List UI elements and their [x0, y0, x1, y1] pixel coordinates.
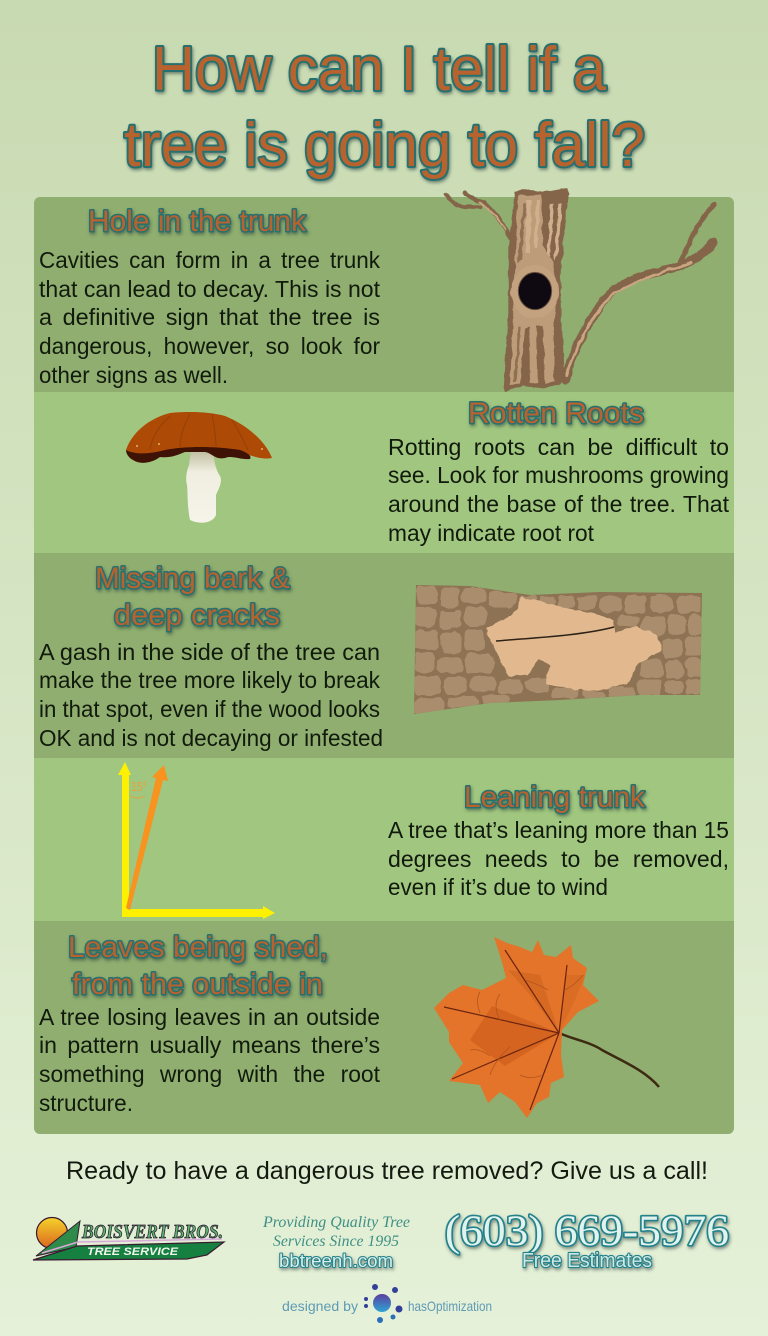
text: leaves description: A tree losing leaves in an outside [39, 1004, 380, 1030]
text: roots description: may indicate root rot [388, 520, 595, 546]
title: How can I tell if a [152, 35, 606, 104]
tagline [262, 1214, 410, 1250]
icon: mushroom [126, 412, 272, 523]
heading: rotten roots: Rotten Roots [468, 397, 644, 430]
text: roots description: see. Look for mushrooms growing [388, 462, 729, 488]
text: roots description [388, 434, 730, 546]
chart: 15 degree lean diagram [118, 762, 275, 919]
text: hole description: Cavities can form in a tree trunk [39, 247, 380, 273]
text: bark description [39, 639, 383, 751]
credit: designed by hasOptimization: hasOptimization [408, 1298, 492, 1314]
credit: designed by hasOptimization [282, 1284, 492, 1323]
panel: leaning trunk [34, 758, 734, 921]
text: leaves description: structure. [39, 1090, 133, 1116]
icon: maple leaf [434, 937, 659, 1118]
text: bark description: A gash in the side of the tree can [39, 639, 380, 665]
panel: hole in the trunk [34, 197, 734, 392]
heading: leaves being shed: from the outside in [72, 968, 323, 1001]
heading: leaning trunk: Leaning trunk [464, 781, 646, 814]
heading: leaves being shed [68, 931, 328, 1001]
heading: missing bark and deep cracks [95, 562, 290, 632]
title: tree is going to fall? [124, 111, 645, 180]
text: roots description: around the base of the tree. That [388, 491, 730, 517]
panel: rotten roots [34, 392, 734, 553]
call to action: Ready to have a dangerous tree removed? Give us a call! [66, 1157, 708, 1185]
text: leaning description: A tree that’s leaning more than 15 [388, 817, 729, 843]
heading: leaves being shed: Leaves being shed, [68, 931, 328, 964]
text: hole description: other signs as well. [39, 362, 228, 388]
credit: designed by hasOptimization: designed by [282, 1298, 358, 1314]
heading: hole in the trunk: Hole in the trunk [88, 205, 307, 238]
logo: Boisvert Bros. Tree Service [33, 1218, 224, 1260]
text: bark description: make the tree more likely to break [39, 667, 380, 693]
text: hole description [39, 247, 381, 388]
icon: damaged bark [414, 585, 702, 714]
text: hole description: that can lead to decay. This is not [39, 276, 381, 302]
free estimates: Free Estimates [522, 1250, 652, 1272]
text: leaves description: something wrong with the root [39, 1061, 381, 1087]
text: hole description: a definitive sign that the tree is [39, 304, 380, 330]
icon: tree trunk with hole [446, 188, 713, 392]
text: leaning description: degrees needs to be removed, [388, 846, 729, 872]
text: roots description: Rotting roots can be difficult to [388, 434, 729, 460]
phone number: (603) 669-5976 [445, 1208, 729, 1255]
panel: leaves being shed [34, 921, 734, 1134]
text: leaning description [388, 817, 729, 900]
tagline: Services Since 1995 [273, 1233, 399, 1250]
text: leaves description [39, 1004, 381, 1116]
chart: 15 degree lean diagram: 15° [131, 779, 147, 794]
text: bark description: OK and is not decaying or infested [39, 725, 383, 751]
text: leaves description: in pattern usually means there’s [39, 1032, 380, 1058]
tagline: Providing Quality Tree [262, 1214, 410, 1231]
title [124, 35, 645, 180]
panel: missing bark and deep cracks [34, 553, 734, 758]
heading: missing bark and deep cracks: Missing bark & [95, 562, 290, 595]
heading: missing bark and deep cracks: deep cracks [114, 599, 280, 632]
logo: Boisvert Bros. Tree Service: BOISVERT BROS. [81, 1221, 223, 1243]
text: leaning description: even if it’s due to wind [388, 874, 608, 900]
text: bark description: in that spot, even if the wood looks [39, 696, 380, 722]
text: hole description: dangerous, however, so look for [39, 333, 380, 359]
logo: Boisvert Bros. Tree Service: TREE SERVICE [87, 1246, 179, 1258]
website: bbtreenh.com [279, 1251, 393, 1271]
